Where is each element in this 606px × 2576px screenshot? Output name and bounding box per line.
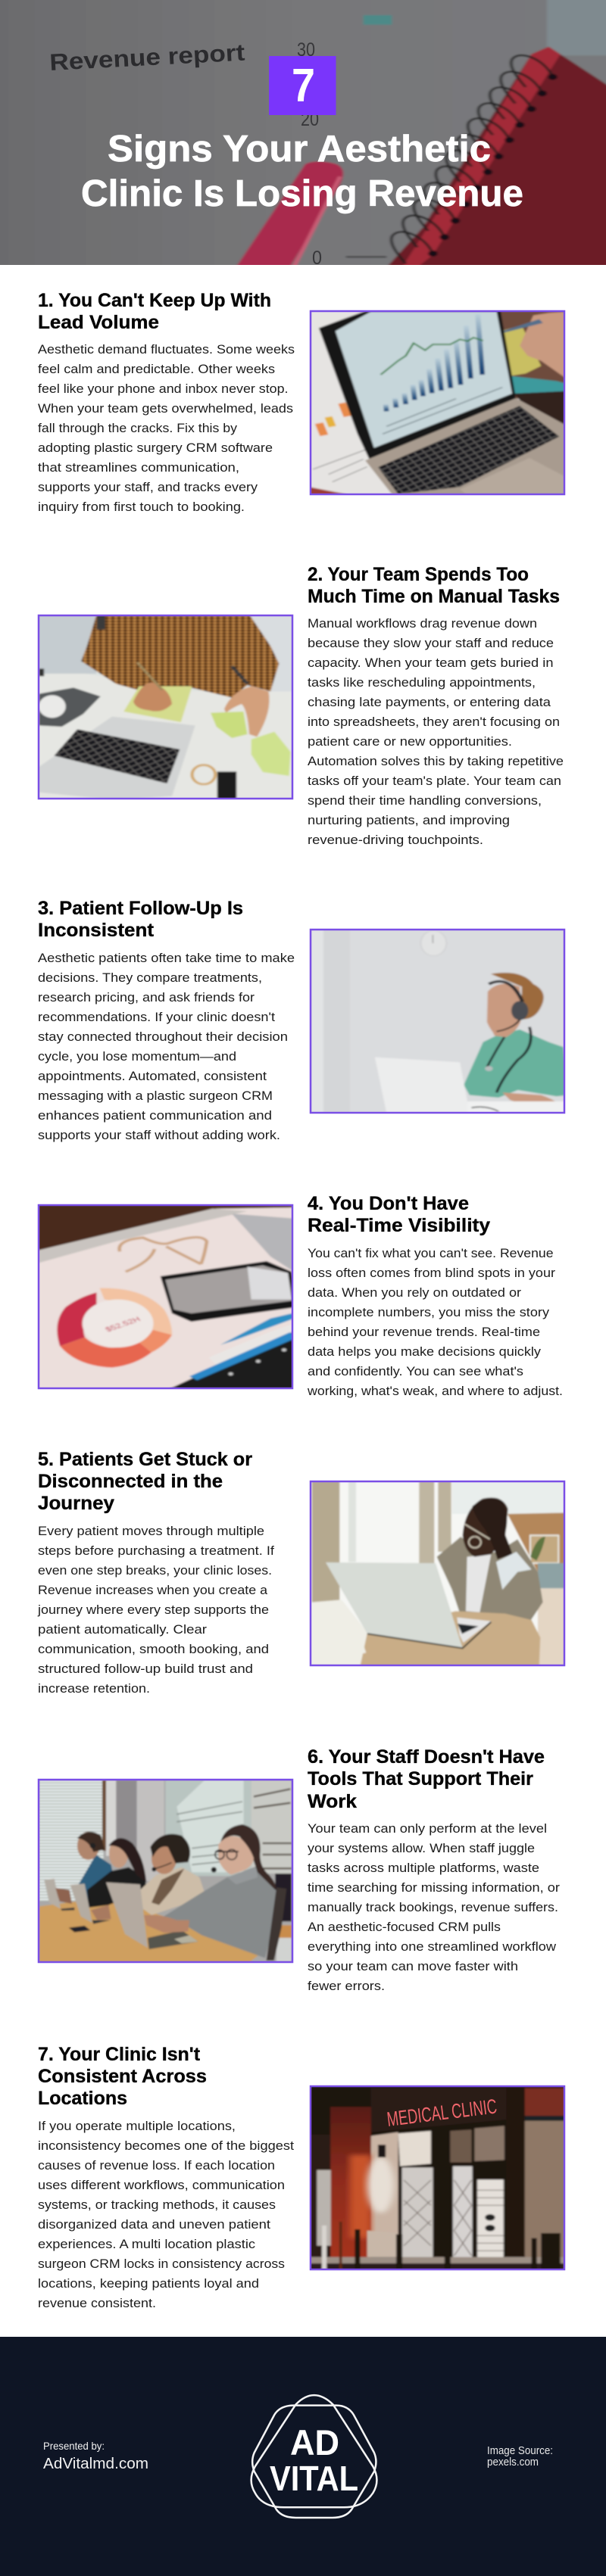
body text 6: Your team can only perform at the level [308, 1821, 547, 1836]
photo: donut chart and phone: $52.52H [104, 1316, 142, 1334]
photo axis labels: 30 [297, 39, 315, 61]
body text 5: communication, smooth booking, and [38, 1642, 269, 1656]
body text 2: patient care or new opportunities. [308, 734, 512, 749]
body text 5: even one step breaks, your clinic loses. [38, 1563, 272, 1578]
section 7 [38, 2044, 570, 2310]
heading 1 [38, 290, 271, 333]
photo text: revenue report: Revenue report [49, 39, 245, 76]
body text 7 [38, 2119, 294, 2310]
body text 3: messaging with a plastic surgeon CRM [38, 1089, 273, 1103]
body text 1: adopting plastic surgery CRM software [38, 441, 273, 455]
photo: person writing at desk [35, 613, 298, 802]
photo sign text: MEDICAL CLINIC [386, 2095, 498, 2131]
body text 7: disorganized data and uneven patient [38, 2217, 270, 2232]
body text 2: capacity. When your team gets buried in [308, 656, 553, 670]
logo: AD VITAL: AD [290, 2422, 339, 2462]
body text 6: your systems allow. When staff juggle [308, 1841, 535, 1855]
body text 2: Manual workflows drag revenue down [308, 616, 537, 631]
body text 7: experiences. A multi location plastic [38, 2237, 256, 2251]
body text 3: Aesthetic patients often take time to make [38, 951, 295, 965]
photo: laptop with chart [308, 308, 570, 497]
body text 5: structured follow-up build trust and [38, 1662, 253, 1676]
body text 4: loss often comes from blind spots in your [308, 1266, 555, 1280]
heading 3: Inconsistent [38, 920, 155, 941]
heading 5 [38, 1449, 252, 1514]
section 6 [38, 1746, 560, 1993]
section 1 [38, 290, 570, 514]
heading 5: Disconnected in the [38, 1471, 223, 1492]
image source: pexels.com [487, 2456, 539, 2469]
body text 1: feel like your phone and inbox never stop. [38, 382, 288, 396]
body text 1: Aesthetic demand fluctuates. Some weeks [38, 342, 295, 357]
body text 2: chasing late payments, or entering data [308, 695, 551, 709]
logo: AD VITAL: VITAL [270, 2459, 358, 2498]
title: Clinic Is Losing Revenue [81, 173, 523, 214]
body text 2: nurturing patients, and improving [308, 813, 510, 827]
photo axis labels: 20 [301, 109, 319, 130]
body text 4: working, what's weak, and where to adjust. [307, 1384, 563, 1398]
body text 1: feel calm and predictable. Other weeks [38, 362, 275, 376]
heading 4: 4. You Don't Have [308, 1193, 469, 1214]
body text 1: When your team gets overwhelmed, leads [38, 401, 293, 416]
body text 2: tasks like rescheduling appointments, [308, 675, 536, 690]
body text 5: journey where every step supports the [37, 1603, 269, 1617]
heading 7 [38, 2044, 207, 2109]
body text 5: Every patient moves through multiple [38, 1524, 264, 1538]
image source: Image Source: [487, 2444, 553, 2457]
body text 7: locations, keeping patients loyal and [38, 2276, 259, 2291]
body text 4: behind your revenue trends. Real-time [308, 1325, 540, 1339]
heading 1: 1. You Can't Keep Up With [38, 290, 271, 311]
body text 5: Revenue increases when you create a [38, 1583, 268, 1597]
body text 4: You can't fix what you can't see. Revenue [308, 1246, 553, 1260]
body text 6: time searching for missing information, or [308, 1880, 560, 1895]
body text 2: revenue-driving touchpoints. [308, 833, 483, 847]
body text 3: recommendations. If your clinic doesn't [38, 1010, 275, 1024]
body text 7: uses different workflows, communication [38, 2178, 285, 2192]
heading 2 [308, 564, 560, 607]
body text 2: because they slow your staff and reduce [308, 636, 554, 650]
heading 7: Consistent Across [38, 2066, 207, 2087]
body text 5: steps before purchasing a treatment. If [38, 1543, 274, 1558]
heading 6: 6. Your Staff Doesn't Have [308, 1746, 545, 1768]
photo: donut chart and phone [35, 1202, 298, 1393]
heading 5: 5. Patients Get Stuck or [38, 1449, 252, 1470]
title [81, 129, 523, 214]
body text 4: data. When you rely on outdated or [308, 1285, 521, 1300]
body text 1: fall through the cracks. Fix this by [38, 421, 238, 435]
body text 3: appointments. Automated, consistent [38, 1069, 267, 1083]
body text 3: research pricing, and ask friends for [38, 990, 255, 1005]
body text 5: patient automatically. Clear [38, 1622, 207, 1637]
section 5 [37, 1449, 568, 1696]
body text 1: inquiry from first touch to booking. [38, 500, 245, 514]
body text 7: systems, or tracking methods, it causes [38, 2198, 276, 2212]
body text 6: An aesthetic-focused CRM pulls [308, 1920, 501, 1934]
heading 5: Journey [38, 1493, 114, 1514]
hero banner [0, 0, 606, 270]
body text 1: that streamlines communication, [38, 460, 239, 475]
heading 7: Locations [38, 2088, 127, 2109]
body text 4 [307, 1246, 563, 1398]
hero background photo [0, 0, 606, 270]
photo: stressed man at laptop [308, 1478, 568, 1671]
title: Signs Your Aesthetic [108, 129, 491, 170]
body text 4: incomplete numbers, you miss the story [308, 1305, 550, 1319]
body text 2: tasks off your team's plate. Your team can [308, 774, 561, 788]
body text 1 [38, 342, 295, 514]
photo: nurse with headset [308, 926, 570, 1117]
photo: call centre team [38, 1779, 293, 1963]
logo: AD VITAL [251, 2395, 376, 2518]
body text 6: tasks across multiple platforms, waste [308, 1861, 539, 1875]
heading 7: 7. Your Clinic Isn't [38, 2044, 201, 2065]
body text 2: spend their time handling conversions, [308, 793, 542, 808]
heading 4: Real-Time Visibility [308, 1215, 490, 1236]
number badge [269, 56, 336, 115]
body text 2: Automation solves this by taking repetitive [308, 754, 564, 768]
presented by: AdVitalmd.com [43, 2456, 148, 2472]
body text 3: enhances patient communication and [38, 1108, 272, 1123]
number badge: 7 [292, 60, 315, 112]
body text 2 [308, 616, 564, 847]
body text 3: decisions. They compare treatments, [38, 970, 262, 985]
heading 3: 3. Patient Follow-Up Is [38, 898, 243, 919]
body text 2: into spreadsheets, they aren't focusing on [308, 715, 560, 729]
body text 3: stay connected throughout their decision [38, 1029, 288, 1044]
body text 7: inconsistency becomes one of the biggest [38, 2138, 294, 2153]
body text 1: supports your staff, and tracks every [38, 480, 258, 494]
heading 6: Tools That Support Their [308, 1768, 533, 1789]
body text 7: If you operate multiple locations, [38, 2119, 236, 2133]
body text 4: data helps you make decisions quickly [308, 1344, 542, 1359]
heading 4 [308, 1193, 490, 1236]
section 4 [35, 1193, 563, 1398]
body text 6: everything into one streamlined workflow [308, 1939, 557, 1954]
body text 3: cycle, you lose momentum—and [38, 1049, 236, 1064]
section 3 [38, 898, 570, 1142]
image source [487, 2444, 553, 2469]
body text 3: supports your staff without adding work. [38, 1128, 280, 1142]
heading 2: 2. Your Team Spends Too [308, 564, 529, 585]
body text 5 [37, 1524, 274, 1696]
heading 6: Work [308, 1791, 357, 1812]
footer [0, 2337, 606, 2576]
section 2 [35, 564, 564, 847]
presented by: Presented by: [43, 2440, 105, 2452]
body text 6: manually track bookings, revenue suffers. [308, 1900, 558, 1914]
heading 6 [308, 1746, 545, 1812]
body text 7: revenue consistent. [38, 2296, 156, 2310]
body text 6 [308, 1821, 560, 1993]
body text 7: causes of revenue loss. If each location [38, 2158, 275, 2173]
body text 6: fewer errors. [308, 1979, 385, 1993]
body text 5: increase retention. [38, 1681, 150, 1696]
photo axis labels [297, 39, 322, 269]
body text 3 [38, 951, 295, 1142]
photo: medical clinic storefront [308, 2084, 570, 2273]
heading 3 [38, 898, 243, 941]
body text 6: so your team can move faster with [308, 1959, 518, 1973]
body text 4: and confidently. You can see what's [308, 1364, 523, 1378]
heading 1: Lead Volume [38, 312, 159, 333]
presented by [43, 2440, 148, 2472]
heading 2: Much Time on Manual Tasks [308, 586, 560, 607]
body text 7: surgeon CRM locks in consistency across [38, 2257, 285, 2271]
photo axis labels: 0 [312, 248, 322, 269]
